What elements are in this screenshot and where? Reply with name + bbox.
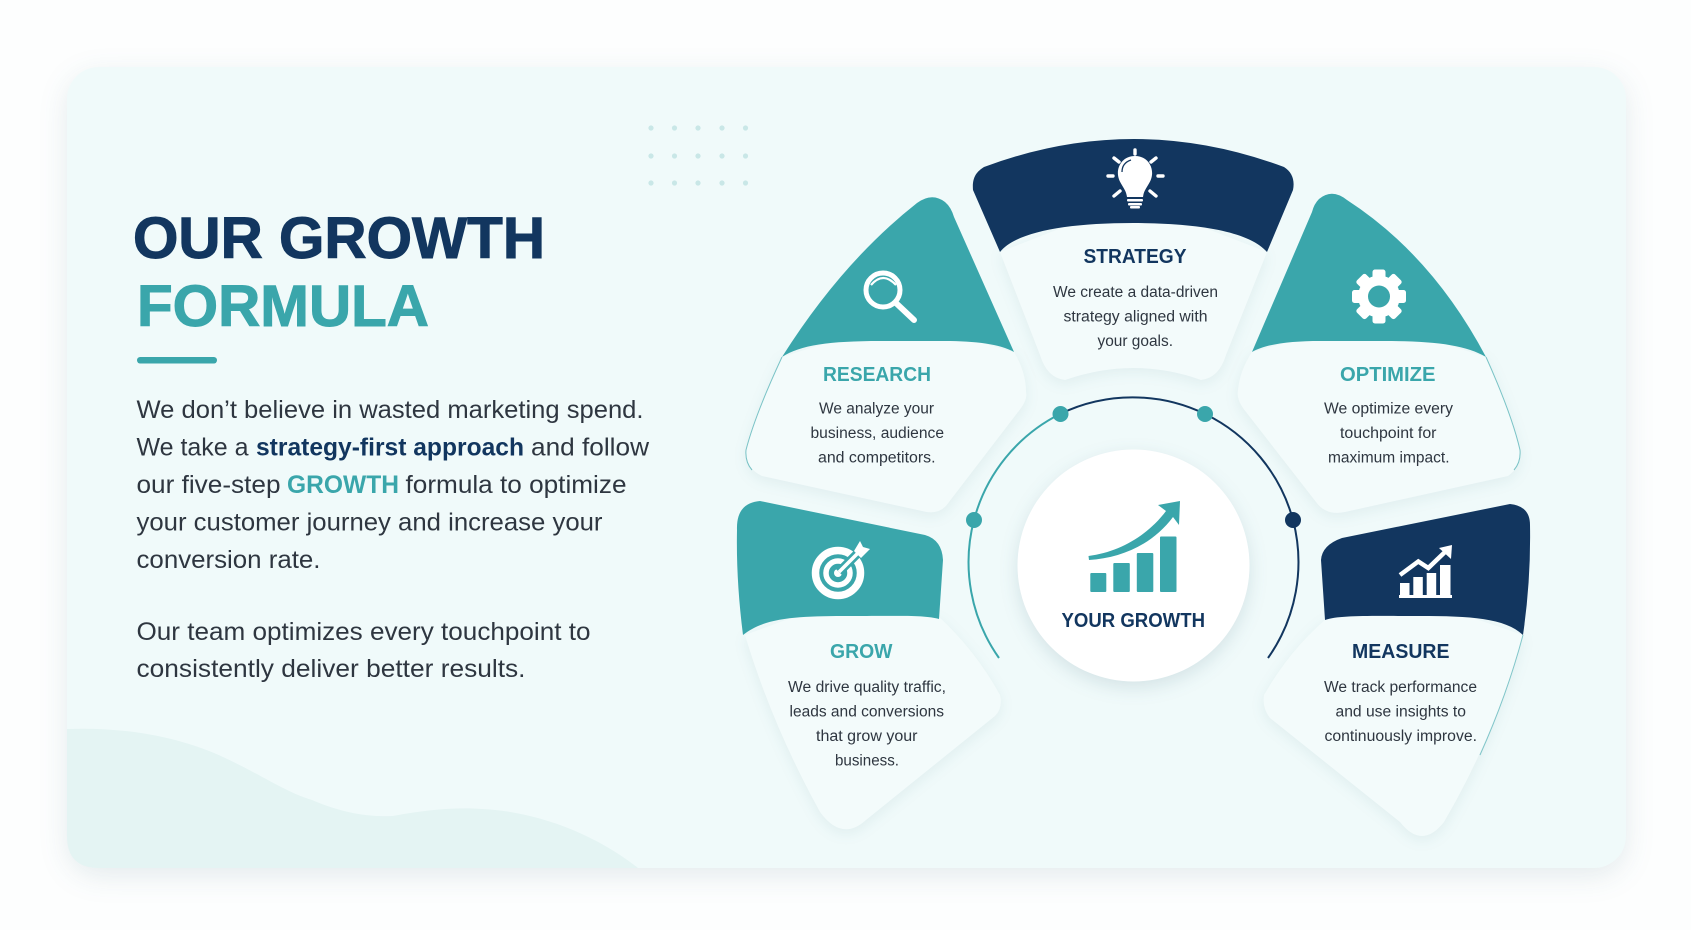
measure description xyxy=(1324,679,1477,745)
text block: closing paragraph: Our team optimizes every touchpoint to xyxy=(136,618,590,646)
title: OUR GROWTH xyxy=(133,206,545,271)
research description: business, audience xyxy=(810,425,944,442)
optimize description: touchpoint for xyxy=(1340,425,1436,442)
progress ring with nodes xyxy=(966,397,1301,658)
icon: gear xyxy=(1352,270,1406,324)
center circle: your growth xyxy=(1018,450,1250,682)
grow description: leads and conversions xyxy=(790,704,944,720)
research heading: RESEARCH xyxy=(823,364,931,386)
measure heading: MEASURE xyxy=(1352,641,1450,663)
research description: and competitors. xyxy=(818,450,936,466)
text block: intro paragraph: We take a xyxy=(136,434,249,462)
text block: intro paragraph: GROWTH xyxy=(287,471,399,499)
text block: intro paragraph xyxy=(136,396,650,574)
text block: closing paragraph: consistently deliver better results. xyxy=(136,655,526,683)
research description xyxy=(810,400,944,466)
grow description: that grow your xyxy=(816,728,918,745)
optimize description xyxy=(1324,400,1453,466)
panel: grow card xyxy=(737,501,1001,829)
icon: light bulb xyxy=(1108,150,1163,208)
panel: optimize card xyxy=(1238,194,1520,513)
text block: intro paragraph: conversion rate. xyxy=(136,546,320,574)
text block: intro paragraph: We don’t believe in wasted marketing spend. xyxy=(136,396,644,424)
dot grid decoration xyxy=(648,125,748,186)
strategy heading: STRATEGY xyxy=(1084,246,1187,268)
icon: bar chart with rising line xyxy=(1399,545,1452,598)
title xyxy=(133,206,545,339)
center label: YOUR GROWTH xyxy=(1062,610,1205,632)
strategy description: strategy aligned with xyxy=(1064,308,1208,326)
text block: intro paragraph: your customer journey and increase your xyxy=(136,508,602,536)
panel: background card xyxy=(67,67,1626,868)
research description: We analyze your xyxy=(819,400,934,418)
text block: intro paragraph: formula to optimize xyxy=(406,471,626,499)
text block: intro paragraph: our five-step xyxy=(136,471,280,499)
panel: strategy card xyxy=(973,139,1294,380)
optimize description: We optimize every xyxy=(1324,400,1453,418)
title: FORMULA xyxy=(137,274,429,339)
icon: magnifier xyxy=(866,273,914,320)
optimize description: maximum impact. xyxy=(1328,450,1450,466)
text block: closing paragraph xyxy=(136,618,590,683)
grow description xyxy=(788,679,946,770)
measure description: and use insights to xyxy=(1336,704,1466,720)
title underline xyxy=(137,357,217,364)
grow description: We drive quality traffic, xyxy=(788,679,946,696)
measure description: We track performance xyxy=(1324,679,1477,696)
strategy description: your goals. xyxy=(1098,333,1173,350)
icon: growth chart xyxy=(1088,501,1180,592)
wave decoration xyxy=(67,729,638,868)
panel: research card xyxy=(746,197,1026,512)
grow heading: GROW xyxy=(830,641,893,663)
optimize heading: OPTIMIZE xyxy=(1340,364,1436,386)
text block: intro paragraph: and follow xyxy=(531,434,650,462)
icon: target with arrow xyxy=(816,541,870,596)
panel: measure card xyxy=(1264,504,1530,836)
strategy description: We create a data-driven xyxy=(1053,284,1218,301)
text block: intro paragraph: strategy-first approach xyxy=(256,434,524,462)
measure description: continuously improve. xyxy=(1324,728,1477,745)
strategy description xyxy=(1053,284,1218,350)
grow description: business. xyxy=(835,752,899,770)
